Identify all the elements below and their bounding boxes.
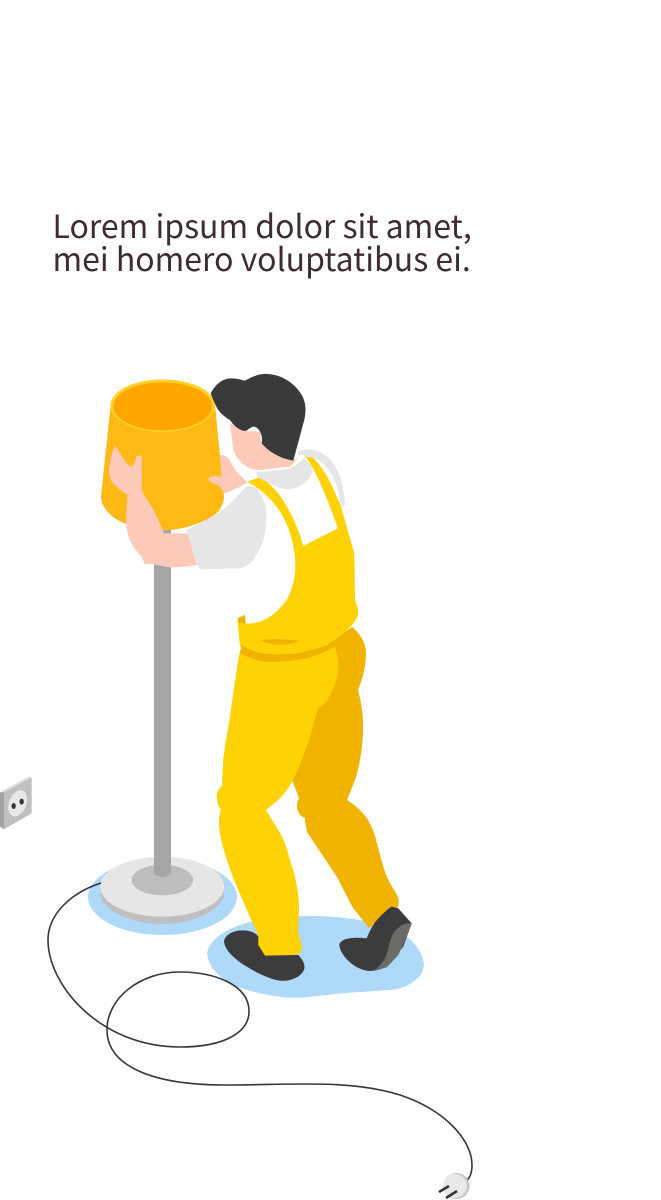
subtitle text block: Lorem ipsum dolor sit amet,	[52, 202, 472, 248]
face and neck	[230, 423, 299, 470]
subtitle text block: mei homero voluptatibus ei.	[52, 234, 471, 280]
power cable	[48, 883, 472, 1181]
man: front leg	[217, 647, 338, 956]
subtitle text block	[52, 202, 472, 280]
collar	[257, 458, 313, 489]
lamp shade	[101, 379, 224, 530]
shadow: man's feet	[207, 916, 424, 998]
shadow: lamp base	[88, 859, 237, 935]
man: head and arms	[109, 374, 313, 569]
man: strap behind shoulder	[297, 450, 345, 507]
hair	[211, 374, 305, 461]
man: shoes	[224, 907, 412, 981]
lamp pole	[154, 530, 171, 877]
lamp base	[100, 857, 224, 924]
left hand and arm	[109, 446, 197, 567]
right hand	[208, 455, 247, 493]
icon: plug	[439, 1173, 470, 1199]
man: overalls bib	[237, 455, 358, 658]
man: waistband	[240, 627, 353, 662]
icon: wall socket	[0, 777, 32, 829]
sleeve	[187, 486, 266, 569]
man: rear leg	[292, 627, 399, 928]
